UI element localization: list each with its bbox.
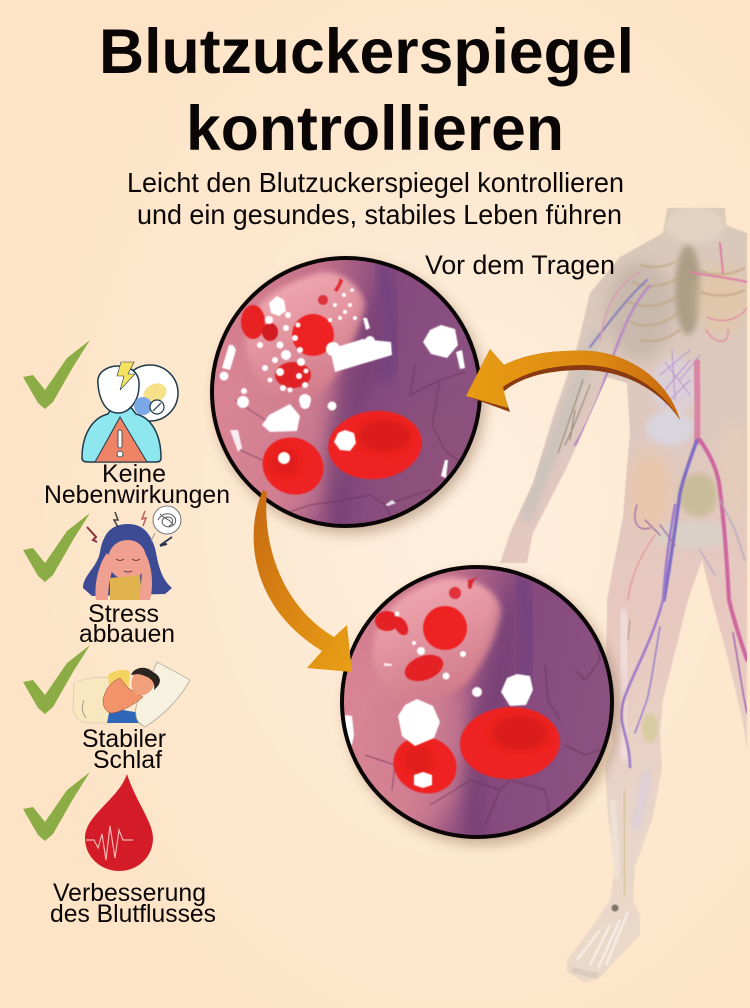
- check mark 4: [23, 772, 90, 841]
- label: stable sleep: Stabiler: [82, 725, 166, 753]
- red blood cells: [241, 278, 425, 504]
- label: reduce stress: abbauen: [79, 620, 175, 648]
- subtitle: und ein gesundes, stabiles Leben führen: [137, 199, 622, 230]
- icon: side effects person: [82, 362, 178, 462]
- label: improved blood flow: des Blutflusses: [50, 900, 216, 928]
- check mark 3: [23, 645, 90, 714]
- icon: blood drop with pulse: [85, 774, 153, 871]
- label: improved blood flow: [50, 879, 216, 928]
- arrow: before circle to after circle: [254, 490, 352, 672]
- subtitle: Leicht den Blutzuckerspiegel kontrollieren: [127, 167, 624, 198]
- title: [99, 17, 634, 164]
- label: no side effects: Nebenwirkungen: [44, 481, 230, 509]
- label: no side effects: Keine: [102, 460, 166, 488]
- arrow: body to before circle: [466, 349, 680, 420]
- sugar crystals: [345, 612, 533, 788]
- label: improved blood flow: Verbesserung: [53, 879, 206, 907]
- label: reduce stress: Stress: [88, 600, 159, 628]
- check mark 2: [23, 513, 90, 582]
- label: before wearing: Vor dem Tragen: [425, 250, 615, 280]
- check mark 1: [23, 340, 90, 409]
- subtitle: [127, 167, 624, 230]
- sugar crystals: [220, 288, 465, 506]
- title: kontrollieren: [186, 94, 564, 164]
- anatomical body illustration: [500, 207, 750, 983]
- icon: stressed woman: [83, 506, 181, 600]
- label: reduce stress: [79, 600, 175, 648]
- red blood cells: [375, 577, 562, 802]
- label: no side effects: [44, 460, 230, 509]
- title: Blutzuckerspiegel: [99, 17, 634, 87]
- icon: sleeping person: [73, 662, 190, 727]
- label: stable sleep: Schlaf: [93, 746, 162, 774]
- label: stable sleep: [82, 725, 166, 774]
- magnified vessel circle: before: [200, 258, 490, 534]
- magnified vessel circle: after: [330, 567, 619, 845]
